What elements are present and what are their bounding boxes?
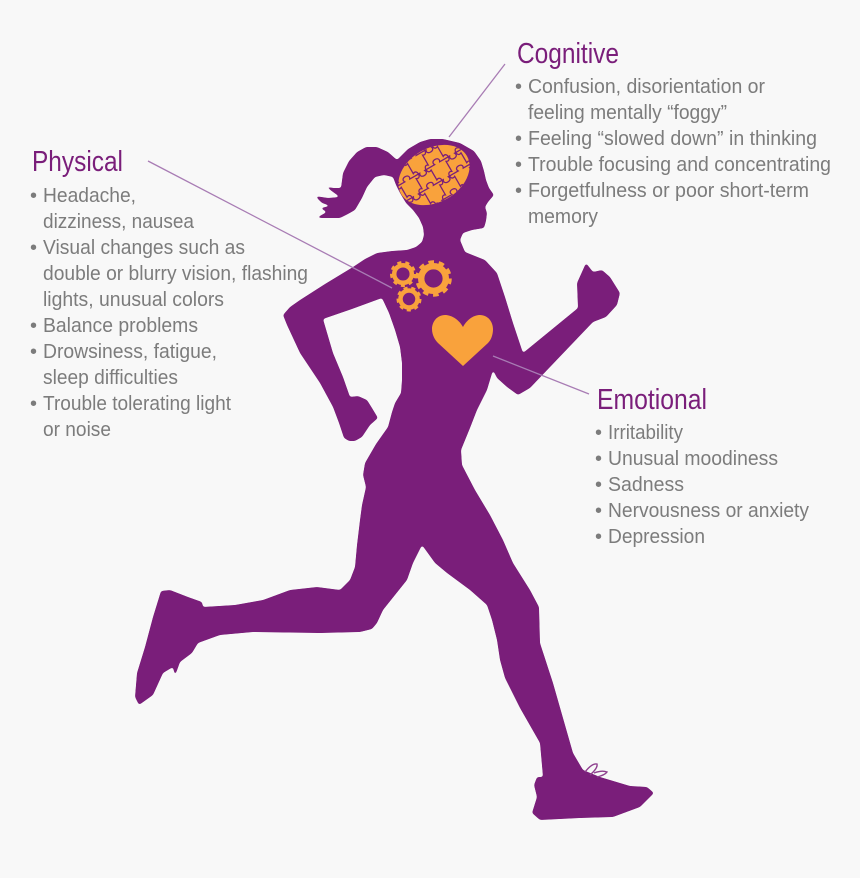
icon: heart [432, 315, 493, 366]
list: physical symptoms: lights, unusual colors [43, 289, 224, 311]
list: cognitive symptoms: Forgetfulness or poor short-term [528, 180, 809, 202]
list: cognitive symptoms: memory [528, 206, 598, 228]
list: emotional symptoms: • [595, 422, 602, 444]
list: cognitive symptoms: • [515, 76, 522, 98]
icon: puzzle brain [398, 144, 470, 206]
list: cognitive symptoms: Feeling “slowed down” in thinking [528, 128, 817, 150]
shoe laces [585, 764, 607, 777]
list: physical symptoms: Balance problems [43, 315, 198, 337]
list: physical symptoms: dizziness, nausea [43, 211, 195, 233]
panel: physical [30, 146, 308, 441]
list: physical symptoms: • [30, 393, 37, 415]
connector: cognitive [449, 64, 505, 137]
heading: cognitive: Cognitive [517, 38, 619, 70]
list: emotional symptoms: • [595, 448, 602, 470]
heading: physical: Physical [32, 146, 123, 178]
connector: physical [148, 161, 392, 288]
list: physical symptoms: Headache, [43, 185, 136, 207]
list: physical symptoms: • [30, 237, 37, 259]
list: physical symptoms: or noise [43, 419, 111, 441]
list: physical symptoms: • [30, 315, 37, 337]
list: emotional symptoms: • [595, 500, 602, 522]
list: cognitive symptoms: feeling mentally “foggy” [528, 102, 727, 124]
list: emotional symptoms: Irritability [608, 422, 683, 444]
list: cognitive symptoms [515, 76, 831, 228]
panel: emotional [595, 384, 809, 548]
list: physical symptoms: Visual changes such as [43, 237, 245, 259]
list: emotional symptoms: Nervousness or anxiety [608, 500, 809, 522]
list: physical symptoms: sleep difficulties [43, 367, 178, 389]
panel: cognitive [515, 38, 831, 228]
list: emotional symptoms: • [595, 474, 602, 496]
list: physical symptoms: double or blurry vision, flashing [43, 263, 308, 285]
list: cognitive symptoms: • [515, 180, 522, 202]
list: physical symptoms: • [30, 341, 37, 363]
list: physical symptoms: Drowsiness, fatigue, [43, 341, 217, 363]
icon: gears [392, 262, 450, 310]
list: emotional symptoms: Unusual moodiness [608, 448, 778, 470]
list: physical symptoms [30, 185, 308, 441]
list: cognitive symptoms: Confusion, disorientation or [528, 76, 765, 98]
heading: emotional: Emotional [597, 384, 707, 416]
list: physical symptoms: Trouble tolerating light [43, 393, 231, 415]
runner silhouette [135, 139, 654, 820]
list: emotional symptoms: Sadness [608, 474, 684, 496]
connector: emotional [493, 356, 589, 394]
list: cognitive symptoms: • [515, 154, 522, 176]
list: physical symptoms: • [30, 185, 37, 207]
list: emotional symptoms: Depression [608, 526, 705, 548]
list: cognitive symptoms: Trouble focusing and concentrating [528, 154, 831, 176]
list: emotional symptoms: • [595, 526, 602, 548]
list: cognitive symptoms: • [515, 128, 522, 150]
list: emotional symptoms [595, 422, 809, 548]
